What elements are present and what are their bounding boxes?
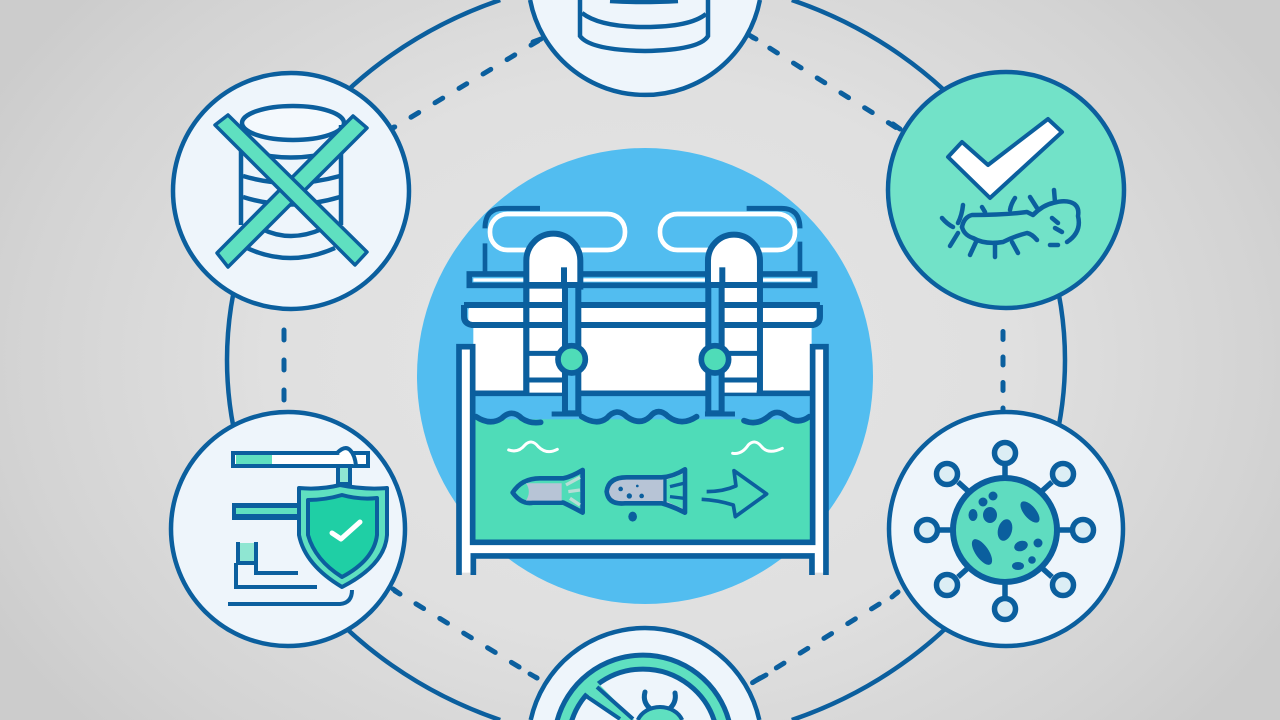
icon: lower pipes (228, 542, 352, 604)
icon: virus spots (968, 492, 1043, 570)
node: shield and pipes (171, 412, 405, 646)
node: virus (889, 412, 1123, 646)
icon: bug (638, 692, 682, 720)
arrow (702, 471, 767, 517)
icon: check mark (948, 119, 1062, 198)
fish two (607, 469, 685, 522)
icon: teal cross (215, 115, 367, 267)
outer ring (227, 0, 1065, 720)
central tank illustration (459, 208, 826, 575)
left pipe (526, 234, 585, 414)
icon: virus body (953, 478, 1057, 582)
node: barrel top (530, 0, 760, 95)
central blue circle (417, 148, 873, 604)
water body (473, 419, 812, 540)
icon: barrel (241, 106, 344, 258)
outer frame (459, 347, 826, 575)
roof bands (464, 242, 820, 325)
building walls (473, 327, 812, 393)
icon: barrel bottom (580, 0, 708, 51)
fish one (513, 470, 583, 513)
icon: virus spikes (916, 442, 1094, 620)
white ripples (509, 442, 782, 454)
icon: top pipe (233, 448, 368, 484)
node: crossed-out barrel (173, 73, 409, 309)
icon: bacterium (942, 190, 1079, 257)
icon: shield (299, 485, 387, 587)
water surface waves (476, 412, 809, 423)
node: no-bug sign (531, 628, 759, 720)
icon: prohibition ring (564, 662, 722, 720)
icon: shield check (332, 522, 360, 539)
icon: prohibition bar (582, 680, 634, 720)
white loops (490, 214, 795, 250)
dashed connectors (284, 35, 1003, 683)
water band (473, 394, 812, 421)
right pipe (701, 235, 760, 414)
overhead pipe arcs (485, 208, 800, 228)
icon: middle pipe (232, 503, 304, 520)
node: bacteria check (888, 72, 1124, 308)
